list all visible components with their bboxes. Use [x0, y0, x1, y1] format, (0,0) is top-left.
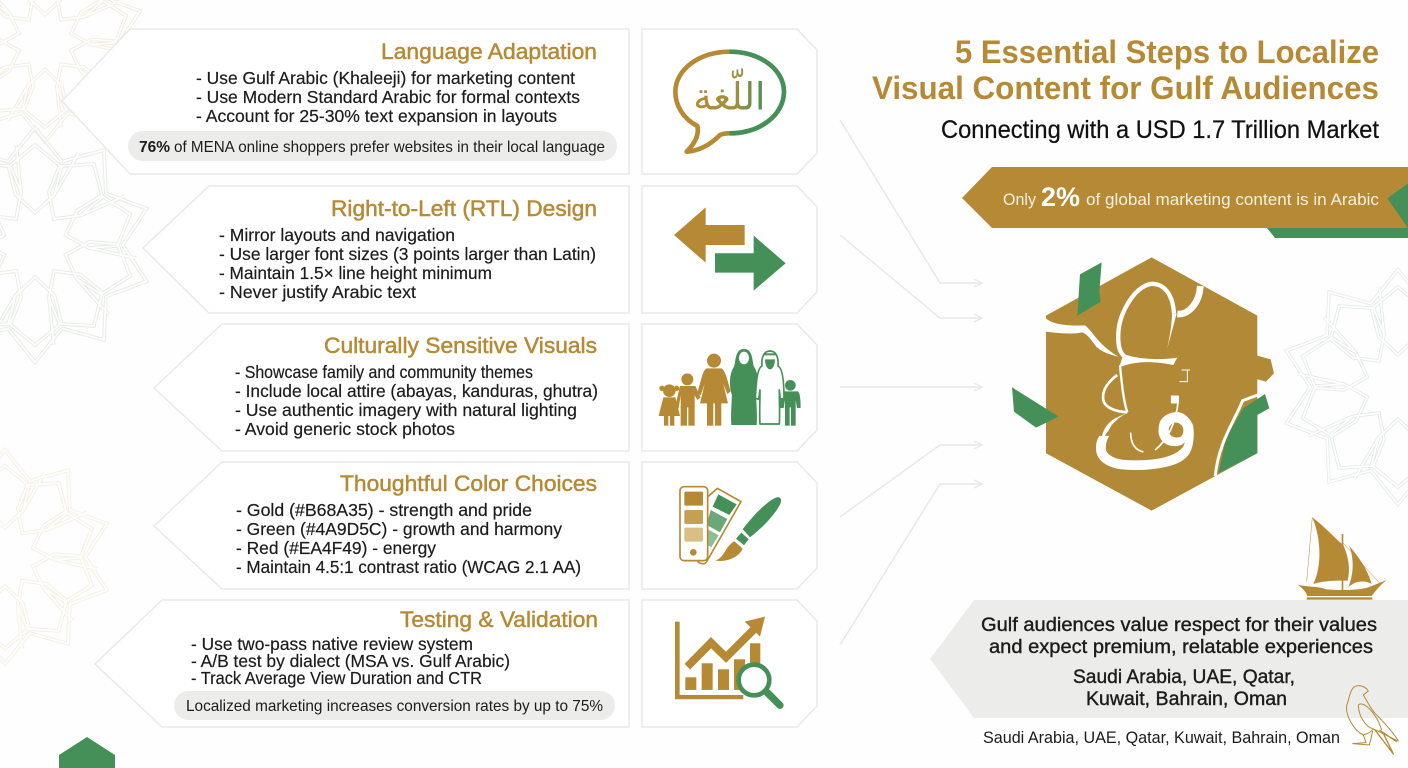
arrow: step 5 to emblem — [840, 480, 982, 645]
text: countries emphasised — [1073, 666, 1295, 710]
text: audience values: and expect premium, relatable experiences — [989, 636, 1373, 658]
banner: 2% statistic — [962, 167, 1408, 238]
bullet list: RTL: - Mirror layouts and navigation — [219, 225, 455, 245]
panel: closing message — [930, 600, 1408, 718]
bullet list: visuals — [235, 362, 598, 439]
bullet list: colors: - Maintain 4.5:1 contrast ratio (WCAG 2.1 AA) — [236, 557, 581, 577]
icon card: color palette — [642, 462, 817, 589]
callout: 76% stat — [128, 131, 617, 161]
bullet list: testing: - A/B test by dialect (MSA vs. Gulf Arabic) — [191, 651, 510, 671]
arrow: step 1 to emblem — [840, 120, 982, 287]
icon: opposing arrows — [674, 207, 786, 291]
bullet list: RTL: - Use larger font sizes (3 points larger than Latin) — [219, 244, 596, 264]
bullet list: testing: - Track Average View Duration and CTR — [191, 668, 482, 688]
decoration: green hexagon — [59, 737, 115, 768]
bullet list: testing: - Use two-pass native review system — [191, 634, 473, 654]
banner: 2% statistic: of global marketing content is in Arabic — [1086, 190, 1379, 209]
bullet list: RTL: - Maintain 1.5× line height minimum — [219, 263, 492, 283]
icon: dhow sailing boat — [1297, 517, 1387, 600]
title — [872, 34, 1379, 106]
heading: language adaptation: Language Adaptation — [381, 39, 597, 64]
icon: speech bubble with Arabic word: اللّغة — [693, 69, 765, 118]
bullet list: visuals: - Showcase family and community themes — [235, 362, 533, 382]
arrow: step 3 to emblem — [840, 383, 982, 391]
icon card: family — [642, 324, 817, 451]
icon: speech bubble with Arabic word — [675, 52, 784, 152]
bullet list: visuals: - Avoid generic stock photos — [235, 419, 455, 439]
bullet list: RTL — [219, 225, 596, 302]
panel: testing and validation — [95, 600, 629, 727]
banner: 2% statistic: Only — [1003, 190, 1036, 209]
bullet list: colors — [236, 500, 581, 577]
icon: growth chart with magnifier — [675, 617, 780, 705]
icon card: speech bubble — [642, 29, 817, 174]
heading: testing and validation: Testing & Validation — [400, 607, 598, 632]
text: audience values: Gulf audiences value respect for their values — [981, 614, 1377, 636]
bullet list: colors: - Red (#EA4F49) - energy — [236, 538, 436, 558]
callout: 76% stat: 76% — [139, 139, 170, 156]
heading: culturally sensitive visuals: Culturally Sensitive Visuals — [324, 333, 597, 358]
text: countries emphasised: Saudi Arabia, UAE, Qatar, — [1073, 666, 1295, 688]
panel: thoughtful color choices — [154, 462, 629, 589]
bullet list: visuals: - Include local attire (abayas, kanduras, ghutra) — [235, 381, 598, 401]
heading: RTL design: Right-to-Left (RTL) Design — [331, 196, 597, 221]
bullet list: colors: - Gold (#B68A35) - strength and pride — [236, 500, 532, 520]
banner: 2% statistic: 2% — [1041, 182, 1080, 212]
icon card: chart — [642, 600, 817, 727]
bullet list: language: - Account for 25-30% text expansion in layouts — [196, 106, 557, 126]
icon: family figures — [659, 349, 801, 426]
icon: falcon — [1347, 686, 1398, 754]
callout: 76% stat: of MENA online shoppers prefer websites in their local language — [174, 139, 605, 156]
text: audience values — [981, 614, 1377, 658]
text: countries emphasised: Kuwait, Bahrain, Oman — [1086, 688, 1287, 710]
bullet list: visuals: - Use authentic imagery with natural lighting — [235, 400, 577, 420]
panel: right-to-left design — [143, 186, 629, 313]
subtitle: Connecting with a USD 1.7 Trillion Market — [941, 116, 1379, 144]
emblem: hexagon with Arabic calligraphy — [1012, 257, 1274, 511]
bullet list: language: - Use Modern Standard Arabic for formal contexts — [196, 87, 580, 107]
callout: conversion stat: Localized marketing increases conversion rates by up to 75% — [186, 698, 603, 715]
arrow: step 2 to emblem — [840, 235, 982, 322]
title: Visual Content for Gulf Audiences — [872, 70, 1379, 106]
bullet list: language — [196, 68, 580, 126]
Arabic letter fa: ف — [1089, 363, 1203, 491]
bullet list: language: - Use Gulf Arabic (Khaleeji) for marketing content — [196, 68, 575, 88]
icon card: arrows — [642, 186, 817, 313]
callout: conversion stat — [174, 691, 615, 720]
heading: color choices: Thoughtful Color Choices — [340, 471, 597, 496]
bullet list: testing — [191, 634, 510, 688]
bullet list: RTL: - Never justify Arabic text — [219, 282, 416, 302]
panel: culturally sensitive visuals — [154, 324, 629, 451]
arrow: step 4 to emblem — [840, 441, 982, 517]
bullet list: colors: - Green (#4A9D5C) - growth and harmony — [236, 519, 562, 539]
text: country list: Saudi Arabia, UAE, Qatar, Kuwait, Bahrain, Oman — [983, 729, 1340, 747]
icon: swatches and brush — [680, 487, 781, 564]
title: 5 Essential Steps to Localize — [955, 34, 1379, 70]
panel: language adaptation — [62, 29, 629, 174]
